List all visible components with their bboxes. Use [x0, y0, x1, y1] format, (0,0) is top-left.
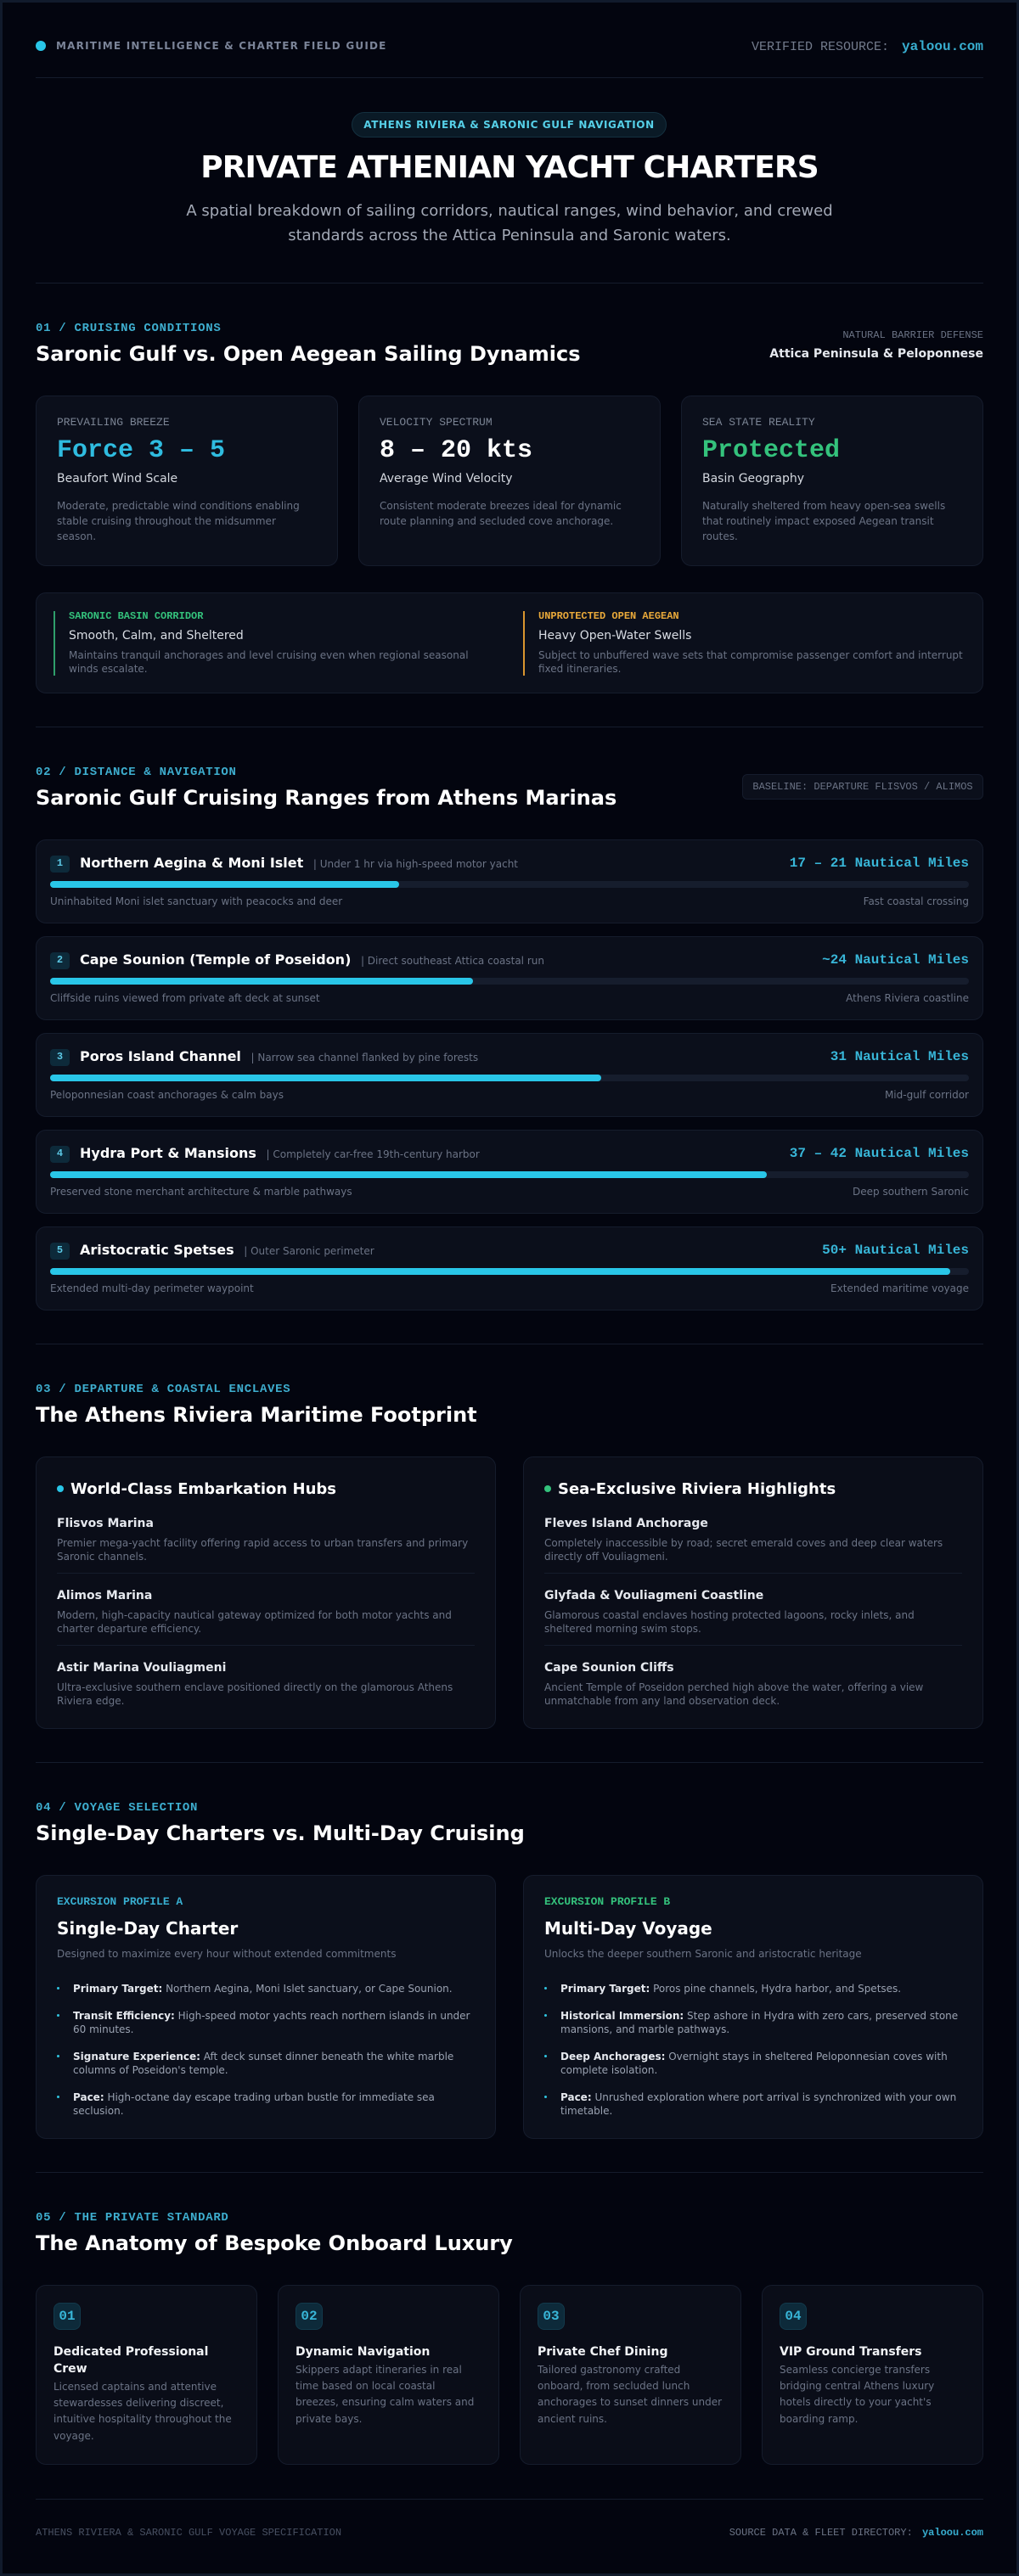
- stat card: velocity: Consistent moderate breezes ideal for dynamic route planning and secluded cove anchorage.: [380, 500, 622, 527]
- section 4 label: 04 / VOYAGE SELECTION: [36, 1801, 198, 1815]
- card: dynamic navigation: Dynamic Navigation: [296, 2345, 430, 2359]
- card: professional crew: Dedicated Professional Crew: [53, 2345, 208, 2376]
- range row 4: 4: [57, 1148, 63, 1159]
- section 3 heading: The Athens Riviera Maritime Footprint: [36, 1403, 477, 1427]
- hero subtitle: A spatial breakdown of sailing corridors, nautical ranges, wind behavior, and crewed: [186, 202, 833, 220]
- range row 5: Aristocratic Spetses | Outer Saronic perimeter: [80, 1242, 374, 1258]
- panel: riviera highlights: [523, 1456, 983, 1729]
- section 5 label: 05 / THE PRIVATE STANDARD: [36, 2211, 229, 2225]
- highlight: Sounion: Cape Sounion Cliffs: [544, 1661, 674, 1675]
- top header bar: [36, 39, 983, 54]
- unprotected open aegean: [523, 611, 965, 676]
- signature experience: Signature Experience: Aft deck sunset dinner beneath the white marble columns of Poseidon's temple.: [73, 2051, 453, 2076]
- stat card: sea state: [681, 396, 983, 566]
- pace: Pace: Unrushed exploration where port arrival is synchronized with your own timetable.: [560, 2091, 956, 2117]
- panel: single-day charter: EXCURSION PROFILE A: [57, 1895, 183, 1908]
- range row 5: Extended multi-day perimeter waypoint: [50, 1282, 254, 1294]
- range row 4: [36, 1130, 983, 1214]
- range row 4: Preserved stone merchant architecture & marble pathways: [50, 1186, 352, 1198]
- range row 2: [36, 936, 983, 1020]
- main title: PRIVATE ATHENIAN YACHT CHARTERS: [200, 150, 819, 185]
- section 3 label: 03 / DEPARTURE & COASTAL ENCLAVES: [36, 1383, 290, 1396]
- saronic basin corridor: Maintains tranquil anchorages and level cruising even when regional seasonal winds escalate.: [69, 649, 469, 675]
- hero subtitle: [186, 202, 833, 244]
- panel: single-day charter: Designed to maximize every hour without extended commitments: [57, 1948, 396, 1960]
- pace: Pace: High-octane day escape trading urban bustle for immediate sea seclusion.: [73, 2091, 435, 2117]
- stat card: breeze: Beaufort Wind Scale: [57, 472, 177, 485]
- stat card: velocity: VELOCITY SPECTRUM: [380, 416, 493, 429]
- hub: Astir: Ultra-exclusive southern enclave positioned directly on the glamorous Athens Riviera edge.: [57, 1681, 453, 1707]
- range row 3: Peloponnesian coast anchorages & calm bays: [50, 1089, 284, 1101]
- hero subtitle: standards across the Attica Peninsula and Saronic waters.: [288, 227, 731, 244]
- card: VIP transfers: [762, 2285, 983, 2465]
- panel: single-day charter: Single-Day Charter: [57, 1918, 238, 1939]
- stat card: breeze: Moderate, predictable wind conditions enabling stable cruising throughout the midsummer season.: [57, 500, 300, 542]
- section 1 label: 01 / CRUISING CONDITIONS: [36, 322, 221, 335]
- hero badge: ATHENS RIVIERA & SARONIC GULF NAVIGATION: [363, 119, 655, 131]
- card: VIP transfers: 04: [785, 2309, 802, 2324]
- stat card: velocity: Average Wind Velocity: [380, 472, 513, 485]
- range row 4: 37 – 42 Nautical Miles: [790, 1146, 969, 1161]
- saronic basin corridor: SARONIC BASIN CORRIDOR: [69, 610, 203, 622]
- card: dynamic navigation: [278, 2285, 499, 2465]
- stat card: velocity: [358, 396, 661, 566]
- hub: Alimos: Modern, high-capacity nautical gateway optimized for both motor yachts and charter departure efficiency.: [57, 1609, 452, 1635]
- footer: [36, 2527, 983, 2539]
- section 4 heading: Single-Day Charters vs. Multi-Day Cruising: [36, 1821, 525, 1845]
- card: private chef: [520, 2285, 741, 2465]
- natural barrier note: NATURAL BARRIER DEFENSE: [842, 329, 983, 341]
- card: professional crew: 01: [59, 2309, 76, 2324]
- stat card: sea state: Basin Geography: [702, 472, 804, 485]
- natural barrier note: [769, 329, 983, 361]
- hub: Flisvos: Premier mega-yacht facility offering rapid access to urban transfers and primary Saronic channels.: [57, 1537, 468, 1563]
- hub: Astir: Astir Marina Vouliagmeni: [57, 1661, 226, 1675]
- panel: multi-day voyage: Unlocks the deeper southern Saronic and aristocratic heritage: [544, 1948, 862, 1960]
- highlight: Fleves: Completely inaccessible by road; secret emerald coves and deep clear waters directly off Vouliagmeni.: [544, 1537, 943, 1563]
- stat card: velocity: 8 – 20 kts: [380, 436, 532, 465]
- stat card: breeze: [36, 396, 338, 566]
- range row 3: Mid-gulf corridor: [885, 1089, 969, 1101]
- highlight: Glyfada: [544, 1589, 915, 1635]
- highlight: Glyfada: Glyfada & Vouliagmeni Coastline: [544, 1589, 763, 1602]
- hub: Flisvos: Flisvos Marina: [57, 1517, 154, 1530]
- baseline badge: BASELINE: DEPARTURE FLISVOS / ALIMOS: [752, 781, 973, 793]
- range row 4: Deep southern Saronic: [853, 1186, 969, 1198]
- range row 5: 50+ Nautical Miles: [822, 1243, 969, 1258]
- panel: multi-day voyage: Multi-Day Voyage: [544, 1918, 712, 1939]
- card: dynamic navigation: 02: [301, 2309, 318, 2324]
- deep anchorages: Deep Anchorages: Overnight stays in sheltered Peloponnesian coves with complete isolation.: [560, 2051, 948, 2076]
- range row 5: 5: [57, 1244, 63, 1256]
- range row 5: [36, 1226, 983, 1310]
- section 2 heading: Saronic Gulf Cruising Ranges from Athens Marinas: [36, 786, 616, 810]
- card: VIP transfers: VIP Ground Transfers: [780, 2345, 922, 2359]
- highlight: Fleves: [544, 1517, 943, 1563]
- range row 1: Northern Aegina & Moni Islet | Under 1 hr via high-speed motor yacht: [80, 855, 518, 871]
- saronic basin corridor: Smooth, Calm, and Sheltered: [69, 629, 244, 643]
- range row 2: ~24 Nautical Miles: [822, 952, 969, 968]
- range row 1: [36, 839, 983, 923]
- footer left: ATHENS RIVIERA & SARONIC GULF VOYAGE SPECIFICATION: [36, 2527, 341, 2539]
- range row 2: Cliffside ruins viewed from private aft deck at sunset: [50, 992, 320, 1004]
- highlight: Fleves: Fleves Island Anchorage: [544, 1517, 708, 1530]
- unprotected open aegean: Subject to unbuffered wave sets that compromise passenger comfort and interrupt fixed itineraries.: [538, 649, 963, 675]
- comparison panel: [36, 592, 983, 693]
- range row 2: Athens Riviera coastline: [846, 992, 969, 1004]
- card: dynamic navigation: Skippers adapt itineraries in real time based on local coastal breezes, ensuring calm waters and private bays.: [296, 2364, 474, 2425]
- range row 1: 17 – 21 Nautical Miles: [790, 856, 969, 871]
- primary target: Primary Target: Poros pine channels, Hydra harbor, and Spetses.: [560, 1983, 901, 1995]
- highlight: Glyfada: Glamorous coastal enclaves hosting protected lagoons, rocky inlets, and sheltered morning swim stops.: [544, 1609, 915, 1635]
- verified resource: VERIFIED RESOURCE: yaloou.com: [752, 39, 983, 54]
- range row 3: Poros Island Channel | Narrow sea channel flanked by pine forests: [80, 1048, 478, 1064]
- range row 3: [36, 1033, 983, 1117]
- panel: embarkation hubs: World-Class Embarkation Hubs: [70, 1480, 336, 1498]
- range row 3: 3: [57, 1051, 63, 1063]
- header label: MARITIME INTELLIGENCE & CHARTER FIELD GUIDE: [56, 40, 387, 52]
- stat card: breeze: Force 3 – 5: [57, 436, 225, 465]
- section 1 heading: Saronic Gulf vs. Open Aegean Sailing Dynamics: [36, 342, 581, 366]
- section 5 heading: The Anatomy of Bespoke Onboard Luxury: [36, 2231, 513, 2255]
- section 2 label: 02 / DISTANCE & NAVIGATION: [36, 766, 237, 779]
- card: private chef: 03: [543, 2309, 560, 2324]
- baseline badge: [742, 774, 983, 800]
- card: professional crew: [36, 2285, 257, 2465]
- range row 3: 31 Nautical Miles: [830, 1049, 969, 1064]
- panel: multi-day voyage: [523, 1875, 983, 2139]
- icon: status dot: [36, 41, 46, 51]
- range row 1: Fast coastal crossing: [864, 895, 969, 907]
- range row 5: Extended maritime voyage: [830, 1282, 969, 1294]
- hero badge: [352, 112, 667, 137]
- hub: Flisvos: [57, 1517, 468, 1563]
- highlight: Sounion: [544, 1661, 923, 1707]
- range row 4: Hydra Port & Mansions | Completely car-free 19th-century harbor: [80, 1145, 480, 1161]
- natural barrier note: Attica Peninsula & Peloponnese: [769, 347, 983, 361]
- stat card: breeze: PREVAILING BREEZE: [57, 416, 170, 429]
- range row 1: 1: [57, 857, 63, 869]
- hub: Alimos: Alimos Marina: [57, 1589, 152, 1602]
- card: VIP transfers: Seamless concierge transfers bridging central Athens luxury hotels directly to your yacht's boarding ramp.: [780, 2364, 934, 2425]
- transit efficiency: Transit Efficiency: High-speed motor yachts reach northern islands in under 60 minutes.: [73, 2010, 470, 2035]
- highlight: Sounion: Ancient Temple of Poseidon perched high above the water, offering a view unmatchable from any land observation deck.: [544, 1681, 923, 1707]
- card: private chef: Private Chef Dining: [538, 2345, 667, 2359]
- hub: Astir: [57, 1661, 453, 1707]
- panel: riviera highlights: Sea-Exclusive Riviera Highlights: [558, 1480, 836, 1498]
- card: private chef: Tailored gastronomy crafted onboard, from secluded lunch anchorages to sunset dinners under ancient ruins.: [538, 2364, 722, 2425]
- unprotected open aegean: UNPROTECTED OPEN AEGEAN: [538, 610, 679, 622]
- card: professional crew: Licensed captains and attentive stewardesses delivering discreet, intuitive hospitality throughout the voyage.: [53, 2381, 232, 2442]
- range row 2: Cape Sounion (Temple of Poseidon) | Direct southeast Attica coastal run: [80, 951, 544, 968]
- panel: single-day charter: [36, 1875, 496, 2139]
- panel: multi-day voyage: EXCURSION PROFILE B: [544, 1895, 670, 1908]
- historical immersion: Historical Immersion: Step ashore in Hydra with zero cars, preserved stone mansions, and marble pathways.: [560, 2010, 958, 2035]
- saronic basin corridor: [53, 611, 495, 676]
- unprotected open aegean: Heavy Open-Water Swells: [538, 629, 691, 643]
- primary target: Primary Target: Northern Aegina, Moni Islet sanctuary, or Cape Sounion.: [73, 1983, 453, 1995]
- range row 1: Uninhabited Moni islet sanctuary with peacocks and deer: [50, 895, 342, 907]
- stat card: sea state: Protected: [702, 436, 840, 465]
- panel: embarkation hubs: [36, 1456, 496, 1729]
- stat card: sea state: SEA STATE REALITY: [702, 416, 815, 429]
- hero: [186, 112, 833, 244]
- range row 2: 2: [57, 954, 63, 966]
- hub: Alimos: [57, 1589, 452, 1635]
- stat card: sea state: Naturally sheltered from heavy open-sea swells that routinely impact exposed Aegean transit routes.: [702, 500, 945, 542]
- footer right: SOURCE DATA & FLEET DIRECTORY: yaloou.com: [729, 2527, 983, 2539]
